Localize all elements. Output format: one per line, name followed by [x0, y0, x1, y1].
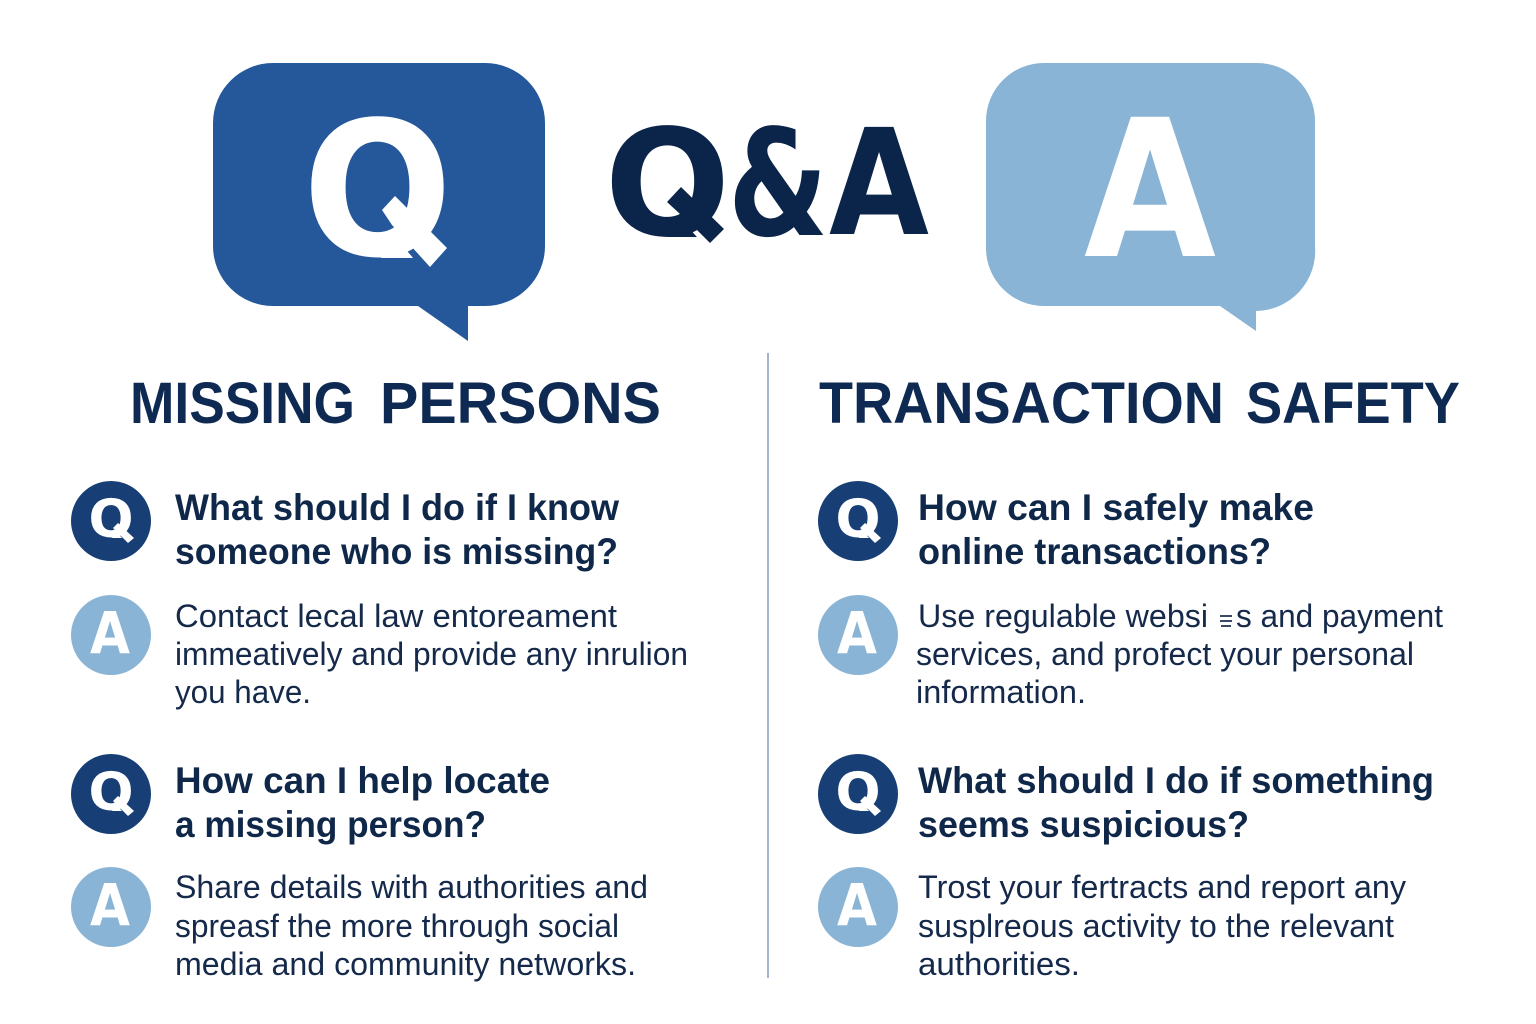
answer 2: Share details with authorities and: [175, 869, 648, 905]
question 2: [175, 760, 550, 845]
icon: question badge 2: Q: [88, 762, 134, 823]
question 2: a missing person?: [175, 804, 486, 845]
icon: answer badge 3: A: [837, 599, 877, 667]
icon: question badge 3: [818, 481, 898, 561]
icon: answer badge 4: [818, 867, 898, 947]
answer 1: Contact lecal law entoreament: [175, 598, 617, 634]
question 3: [918, 487, 1314, 572]
title: [612, 125, 928, 243]
icon: question badge 1: [71, 481, 151, 561]
icon: answer badge 2: A: [90, 871, 130, 939]
icon: question badge 1: Q: [88, 489, 134, 550]
answer 1: immeatively and provide any inrulion: [175, 636, 688, 672]
answer 2: media and community networks.: [175, 946, 636, 982]
answer 2: spreasf the more through social: [175, 908, 619, 944]
question 1: someone who is missing?: [175, 531, 618, 572]
heading: missing persons: [130, 371, 661, 436]
answer 3: services, and profect your personal: [916, 636, 1414, 672]
icon: answer badge 4: A: [837, 871, 877, 939]
icon: answer badge 2: [71, 867, 151, 947]
title: Q: [604, 98, 730, 270]
answer 3: [916, 598, 1443, 710]
question 1: [175, 487, 619, 572]
panel: transaction safety: [818, 371, 1460, 982]
title: A: [829, 98, 929, 269]
answer 1: [175, 598, 688, 710]
question 3: online transactions?: [918, 531, 1271, 572]
question 4: [918, 760, 1434, 845]
answer 4: authorities.: [918, 946, 1080, 982]
heading: transaction safety: [819, 371, 1460, 436]
question 4: seems suspicious?: [918, 804, 1249, 845]
icon: answer badge 1: A: [90, 599, 130, 667]
question 3: How can I safely make: [918, 487, 1314, 528]
icon: question badge 3: Q: [835, 489, 881, 550]
answer 3: Use regulable websi: [918, 598, 1208, 634]
icon: large A speech bubble: [986, 63, 1315, 331]
icon: question badge 4: Q: [835, 762, 881, 823]
question 4: What should I do if something: [918, 760, 1434, 801]
icon: answer badge 3: [818, 595, 898, 675]
answer 3: s and payment: [1236, 598, 1443, 634]
answer 1: you have.: [175, 674, 311, 710]
heading: missing persons: PERSONS: [380, 371, 661, 436]
question 2: How can I help locate: [175, 760, 550, 801]
title: &: [728, 98, 828, 270]
icon: large Q speech bubble: [213, 63, 545, 341]
heading: transaction safety: SAFETY: [1246, 371, 1460, 436]
heading: missing persons: MISSING: [130, 371, 355, 436]
icon: question badge 2: [71, 754, 151, 834]
icon: large Q speech bubble: Q: [302, 82, 452, 300]
question 1: What should I do if I know: [175, 487, 619, 528]
icon: answer badge 1: [71, 595, 151, 675]
answer 4: Trost your fertracts and report any: [918, 869, 1406, 905]
heading: transaction safety: TRANSACTION: [819, 371, 1224, 436]
answer 4: [918, 869, 1406, 982]
answer 3: information.: [916, 674, 1086, 710]
answer 2: [175, 869, 648, 982]
icon: question badge 4: [818, 754, 898, 834]
answer 4: susplreous activity to the relevant: [918, 908, 1394, 944]
panel: missing persons: [71, 371, 688, 982]
icon: large A speech bubble: A: [1084, 80, 1216, 302]
